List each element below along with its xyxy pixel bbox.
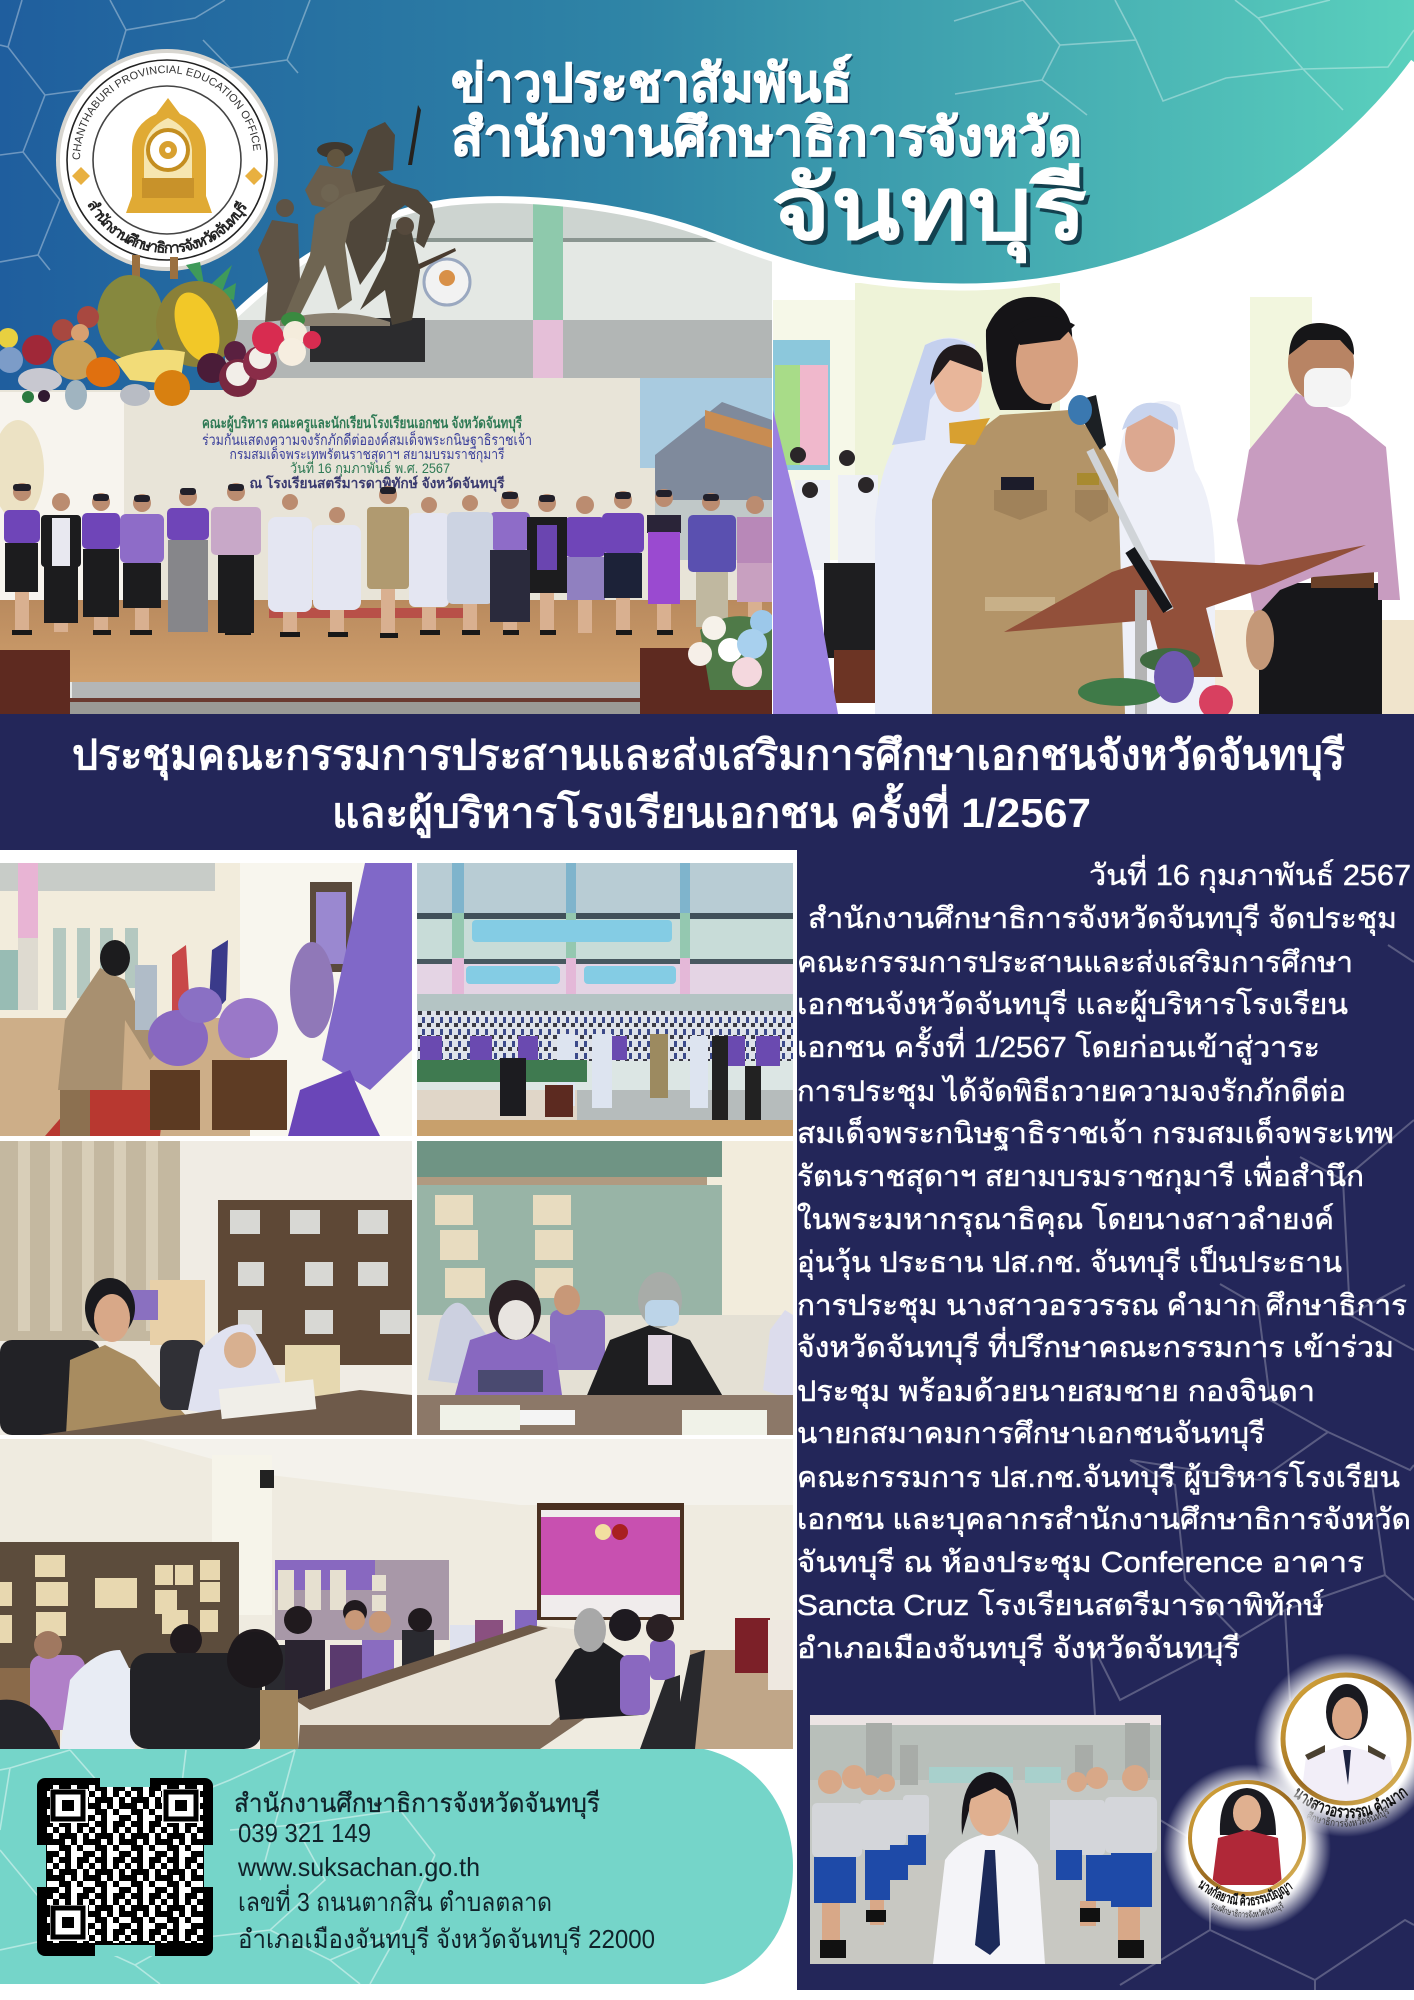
title band	[0, 714, 1414, 850]
man in pink shirt	[1237, 323, 1400, 714]
foreground nun and chair	[0, 1632, 298, 1749]
date line: วันที่ 16 กุมภาพันธ์ 2567	[1089, 855, 1411, 893]
address line 1: เลขที่ 3 ถนนตากสิน ตำบลตลาด	[238, 1884, 552, 1917]
stage floor	[0, 600, 772, 682]
woman in uniform	[66, 1278, 190, 1435]
icon: provincial education office logo: CHANTHABURI PROVINCIAL EDUCATION OFFICE	[72, 65, 261, 160]
article text: สมเด็จพระกนิษฐาธิราชเจ้า กรมสมเด็จพระเทพ	[797, 1115, 1394, 1151]
icon: fruits and gemstones cluster	[0, 255, 321, 410]
article text: รัตนราชสุดาฯ สยามบรมราชกุมารี เพื่อสำนึก	[797, 1156, 1364, 1194]
header banner background	[0, 0, 1414, 390]
photo: woman speaking at podium	[773, 283, 1414, 714]
article text: เอกชนจังหวัดจันทบุรี และผู้บริหารโรงเรียน	[797, 987, 1348, 1022]
nun writing	[188, 1324, 285, 1420]
flowers at podium	[1078, 648, 1233, 719]
title: ข่าวประชาสัมพันธ์: ข่าวประชาสัมพันธ์	[453, 56, 854, 115]
stage banner: กรมสมเด็จพระเทพรัตนราชสุดาฯ สยามบรมราชกุมารี	[230, 445, 505, 463]
panel: news text and portraits	[797, 850, 1414, 1990]
photo: hall and group on stage	[0, 190, 774, 714]
purple drape	[322, 863, 412, 1090]
portrait: director	[1254, 1653, 1414, 1837]
article text: การประชุม ได้จัดพิธีถวายความจงรักภักดีต่อ	[797, 1074, 1346, 1109]
organisation name: สำนักงานศึกษาธิการจังหวัดจันทบุรี	[234, 1788, 600, 1819]
icon: bronze statue on pedestal	[258, 105, 456, 362]
photo: conference room	[0, 1439, 793, 1749]
title: สำนักงานศึกษาธิการจังหวัด: สำนักงานศึกษาธิการจังหวัด	[453, 111, 1084, 169]
portrait: deputy director: รองศึกษาธิการจังหวัดจันทบุรี	[1212, 1900, 1284, 1918]
icon: provincial education office logo: สำนักงานศึกษาธิการจังหวัดจันทบุรี	[88, 200, 247, 254]
sign: school emblem on wall	[424, 259, 470, 305]
icon: gold emblem	[126, 98, 212, 213]
portrait: director: ศึกษาธิการจังหวัดจันทบุรี	[1306, 1806, 1390, 1827]
article text: จังหวัดจันทบุรี ที่ปรึกษาคณะกรรมการ เข้าร่วม	[797, 1327, 1394, 1365]
notice board	[773, 340, 830, 470]
projection screen	[537, 1503, 684, 1620]
flower arrangement	[688, 610, 774, 690]
photo: meeting with people in purple	[417, 1141, 793, 1435]
photo: assembly hall with students	[417, 863, 793, 1136]
title: ข่าวประชาสัมพันธ์: ข่าวประชาสัมพันธ์	[451, 54, 852, 113]
stage banner	[0, 378, 772, 602]
trophy cabinets	[0, 1542, 449, 1668]
article text: สำนักงานศึกษาธิการจังหวัดจันทบุรี จัดประชุม	[808, 903, 1397, 936]
photo: meeting table with woman in uniform	[0, 1141, 412, 1435]
article text	[797, 903, 1411, 1666]
article text: คณะกรรมการประสานและส่งเสริมการศึกษา	[797, 947, 1353, 979]
title: จันทบุรี: จันทบุรี	[771, 159, 1087, 264]
photo: students in line	[810, 1715, 1161, 1964]
microphone stand	[1068, 395, 1170, 714]
stage banner: ณ โรงเรียนสตรีมารดาพิทักษ์ จังหวัดจันทบุรี	[250, 474, 505, 492]
article text: เอกชน และบุคลากรสำนักงานศึกษาธิการจังหวัด	[797, 1504, 1411, 1537]
woman in khaki	[58, 940, 158, 1136]
people along table	[30, 1600, 537, 1730]
wooden podium	[1004, 545, 1366, 677]
conference table	[295, 1625, 590, 1749]
website: www.suksachan.go.th	[237, 1852, 480, 1882]
group of people	[4, 483, 773, 638]
article text: Sancta Cruz โรงเรียนสตรีมารดาพิทักษ์	[797, 1588, 1325, 1622]
photo: woman placing flowers at royal portrait	[0, 863, 412, 1136]
portrait: deputy director: นางกัลยาณี คิวธรรมปัญญา	[1198, 1880, 1293, 1906]
icon: provincial education office logo	[56, 49, 278, 271]
article text: อุ่นวุ้น ประธาน ปส.กช. จันทบุรี เป็นประธาน	[797, 1244, 1342, 1280]
panel: contact information	[0, 1749, 793, 1984]
headline line 2: และผู้บริหารโรงเรียนเอกชน ครั้งที่ 1/2567	[332, 783, 1091, 839]
article text: การประชุม นางสาวอรวรรณ คำมาก ศึกษาธิการ	[797, 1290, 1407, 1323]
nun left	[875, 338, 983, 714]
article text: จันทบุรี ณ ห้องประชุม Conference อาคาร	[797, 1547, 1364, 1580]
article text: เอกชน ครั้งที่ 1/2567 โดยก่อนเข้าสู่วาระ	[797, 1026, 1320, 1065]
stage banner: คณะผู้บริหาร คณะครูและนักเรียนโรงเรียนเอกชน จังหวัดจันทบุรี	[202, 413, 523, 433]
flower arrangements	[148, 942, 334, 1130]
article text: นายกสมาคมการศึกษาเอกชนจันทบุรี	[797, 1418, 1265, 1451]
article text: ในพระมหากรุณาธิคุณ โดยนางสาวลำยงค์	[797, 1202, 1334, 1237]
portrait: deputy director	[1163, 1764, 1331, 1932]
man in black jacket	[585, 1272, 725, 1400]
article text: คณะกรรมการ ปส.กช.จันทบุรี ผู้บริหารโรงเรียน	[797, 1460, 1400, 1495]
stage banner: ร่วมกันแสดงความจงรักภักดีต่อองค์สมเด็จพระกนิษฐาธิราชเจ้า	[202, 430, 532, 449]
address line 2: อำเภอเมืองจันทบุรี จังหวัดจันทบุรี 22000	[238, 1924, 655, 1955]
purple drape	[773, 410, 838, 714]
QR code	[37, 1778, 213, 1956]
article text: อำเภอเมืองจันทบุรี จังหวัดจันทบุรี	[797, 1633, 1240, 1666]
headline line 1: ประชุมคณะกรรมการประสานและส่งเสริมการศึกษาเอกชนจังหวัดจันทบุรี	[72, 732, 1345, 781]
phone number: 039 321 149	[238, 1818, 371, 1848]
right side attendees	[555, 1608, 705, 1749]
nun centre	[1116, 401, 1215, 714]
title: จันทบุรี: จันทบุรี	[775, 163, 1091, 268]
girl in white shirt	[933, 1772, 1045, 1964]
woman in khaki uniform	[932, 297, 1125, 714]
portrait: director: นางสาวอรวรรณ คำมาก	[1294, 1788, 1408, 1818]
article text: ประชุม พร้อมด้วยนายสมชาย กองจินดา	[797, 1376, 1315, 1409]
title: สำนักงานศึกษาธิการจังหวัด: สำนักงานศึกษาธิการจังหวัด	[451, 109, 1082, 167]
woman in purple with mask	[455, 1280, 562, 1395]
stage banner: วันที่ 16 กุมภาพันธ์ พ.ศ. 2567	[290, 459, 450, 477]
